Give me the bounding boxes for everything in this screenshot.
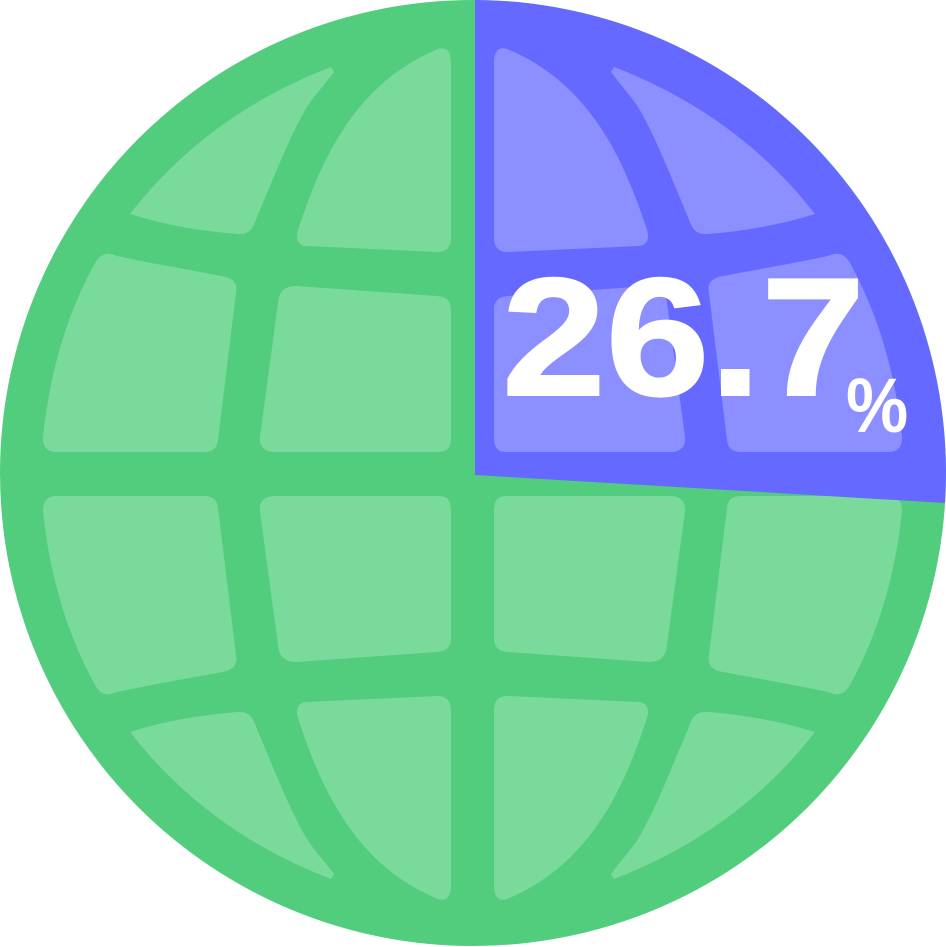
value label <box>502 243 908 449</box>
percent sign: % <box>846 362 908 449</box>
value number: 26.7 <box>502 243 865 431</box>
highlighted pie sector <box>475 0 946 503</box>
globe grid panels: sector <box>494 48 902 452</box>
